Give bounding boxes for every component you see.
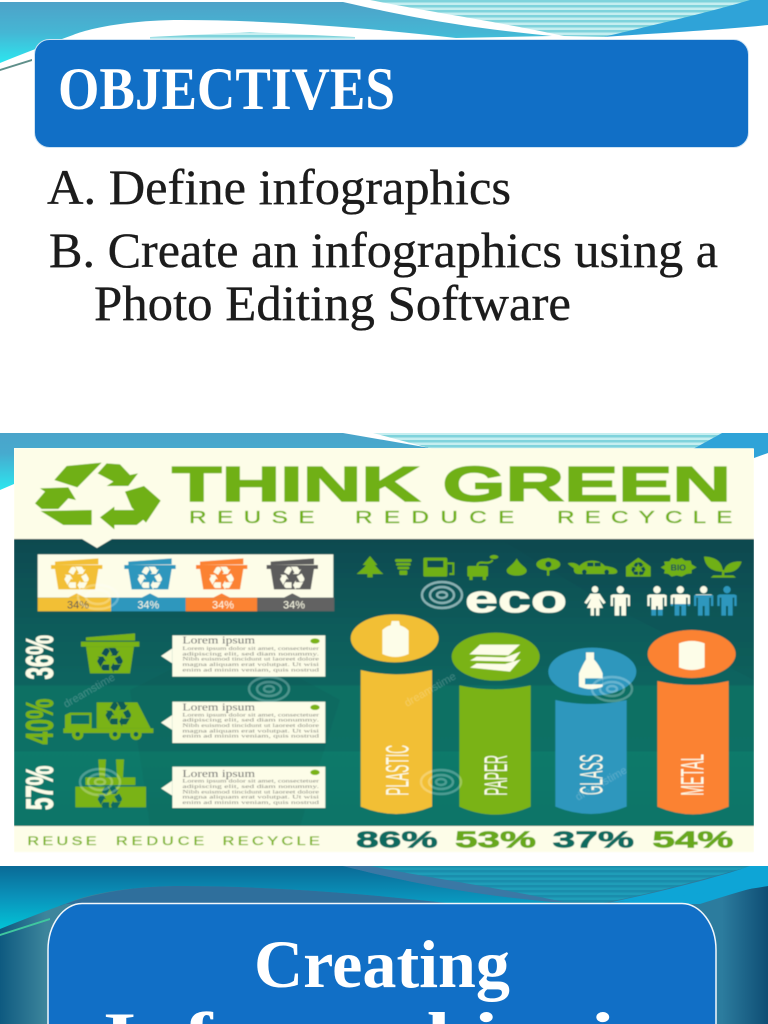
icon: large recycling logo (35, 463, 161, 529)
callout: first note: Nibh euismod tincidunt ut laoreet dolore (182, 658, 320, 663)
icon: green truck (63, 696, 153, 740)
icon: yellow bin: ♻ (62, 559, 92, 598)
bar: glass: GLASS (574, 754, 610, 795)
eco icon row (357, 555, 742, 581)
eco wordmark: eco (465, 579, 567, 621)
callout: third note: enim ad minim veniam, quis nostrud (182, 801, 320, 806)
subtitle: reuse reduce recycle: RECYCLE (557, 507, 733, 527)
bar: glass (548, 648, 636, 814)
callout: second note: Lorem ipsum dolor sit amet, consectetuer (182, 713, 320, 718)
stat: 36%: 36% (19, 635, 62, 679)
bin percentages: 34% (283, 599, 305, 611)
people pictograms (584, 586, 737, 616)
icon: fuel pump (423, 558, 453, 577)
bar percentages: 37% (553, 827, 634, 853)
bins legend (38, 554, 334, 611)
callout: second note: adipiscing elit, sed diam nonummy. (182, 719, 319, 724)
subtitle: reuse reduce recycle (189, 507, 732, 527)
icon: grey bin (267, 558, 318, 598)
icon: flower (536, 558, 560, 576)
objectives list: A. Define infographics (47, 159, 511, 215)
heading text: OBJECTIVES (58, 56, 395, 122)
title card (48, 904, 716, 1024)
left statistics column (19, 633, 325, 848)
icon: green factory (75, 759, 146, 818)
icon: blue bin (124, 558, 176, 598)
bar percentages (356, 827, 733, 853)
pointer (82, 539, 112, 548)
bar percentages: 54% (652, 827, 733, 853)
callout: second note (161, 702, 325, 743)
icon: bio badge (661, 558, 697, 577)
icon: yellow bin (51, 558, 102, 598)
slide: think green example (0, 433, 768, 853)
icon: electric plug car (467, 555, 498, 580)
callout: second note: magna aliquam erat volutpat. Ut wisi (182, 729, 320, 734)
wave decoration (0, 866, 768, 936)
icon: green bin (81, 633, 139, 681)
callout: third note: adipiscing elit, sed diam nonummy. (182, 785, 319, 790)
dark background (0, 866, 768, 1024)
icon: green factory: ♻ (95, 779, 125, 818)
heading panel: objectives (34, 40, 748, 148)
footer: reuse reduce recycle: RECYCLE (223, 835, 320, 848)
icon: recycling tag (626, 558, 651, 581)
watermarks (62, 585, 632, 804)
icon: orange bin: ♻ (207, 559, 237, 598)
callout: first note (161, 635, 325, 677)
icon: bio badge: BIO (671, 563, 686, 573)
callout: first note: adipiscing elit, sed diam nonummy. (182, 652, 319, 657)
slide: creating infographics (0, 866, 768, 1024)
bar percentages: 53% (455, 827, 536, 853)
icon: tree (357, 556, 383, 577)
icon: sprout (704, 557, 742, 578)
icon: blue bin: ♻ (135, 559, 165, 598)
stat: 40%: 40% (19, 699, 62, 744)
objectives list: Photo Editing Software (94, 275, 571, 331)
bar: metal: METAL (675, 754, 711, 796)
watermarks: dreamstime (62, 671, 117, 711)
bin percentages: 34% (67, 599, 89, 611)
callout: third note: magna aliquam erat volutpat. Ut wisi (182, 796, 320, 801)
icon: green truck: ♻ (103, 696, 134, 736)
stat: 57%: 57% (19, 766, 62, 810)
icon: grey bin: ♻ (277, 559, 307, 598)
slide: objectives (0, 0, 768, 331)
footer: reuse reduce recycle: REDUCE (116, 835, 204, 848)
bin percentages: 34% (212, 599, 234, 611)
top wave decoration (0, 0, 768, 71)
bar percentages: 86% (356, 827, 438, 853)
bar: paper: PAPER (478, 755, 514, 796)
infographic image panel (14, 448, 754, 853)
footer: reuse reduce recycle: REUSE (27, 835, 97, 848)
footer: reuse reduce recycle (27, 835, 320, 848)
callout: third note: Lorem ipsum (182, 769, 256, 780)
swirl watermark (422, 582, 462, 608)
cylinder chart (351, 614, 736, 853)
callout: first note: Lorem ipsum (182, 635, 256, 646)
icon: recycling tag: ♻ (630, 558, 647, 581)
bin percentages: 34% (137, 599, 160, 611)
icon: orange bin (196, 558, 247, 598)
watermarks: dreamstime (402, 670, 458, 710)
callout: third note: Nibh euismod tincidunt ut laoreet dolore (182, 790, 320, 795)
title: think green: THINK GREEN (172, 458, 731, 512)
icon: car (568, 561, 617, 574)
objectives list: B. Create an infographics using a (49, 222, 718, 278)
callout: third note: Lorem ipsum dolor sit amet, consectetuer (182, 780, 320, 785)
teal body (14, 539, 754, 826)
objectives list (47, 159, 718, 331)
subtitle: reuse reduce recycle: REDUCE (355, 507, 514, 527)
bin percentages (67, 599, 305, 611)
callout: third note (161, 767, 325, 808)
bar: plastic: PLASTIC (379, 745, 415, 796)
title text: Creating (254, 926, 510, 1002)
bar: plastic (351, 614, 439, 814)
icon: bulb (395, 559, 412, 575)
wave decoration (0, 433, 768, 490)
bottom cream band (14, 826, 754, 852)
watermarks: dreamstime (574, 764, 629, 804)
icon: green bin: ♻ (94, 641, 126, 681)
callout: first note: enim ad minim veniam, quis nostrud (182, 668, 320, 673)
cream header band (14, 448, 754, 539)
icon: water drop (507, 558, 527, 576)
bar: metal (648, 630, 736, 814)
callout: second note: Nibh euismod tincidunt ut laoreet dolore (182, 724, 320, 729)
callout: second note: enim ad minim veniam, quis nostrud (182, 735, 320, 740)
callout: first note: magna aliquam erat volutpat. Ut wisi (182, 663, 320, 668)
bar: paper (452, 633, 540, 815)
callout: second note: Lorem ipsum (182, 703, 256, 714)
subtitle: reuse reduce recycle: REUSE (189, 507, 315, 527)
callout: first note: Lorem ipsum dolor sit amet, consectetuer (182, 647, 320, 652)
